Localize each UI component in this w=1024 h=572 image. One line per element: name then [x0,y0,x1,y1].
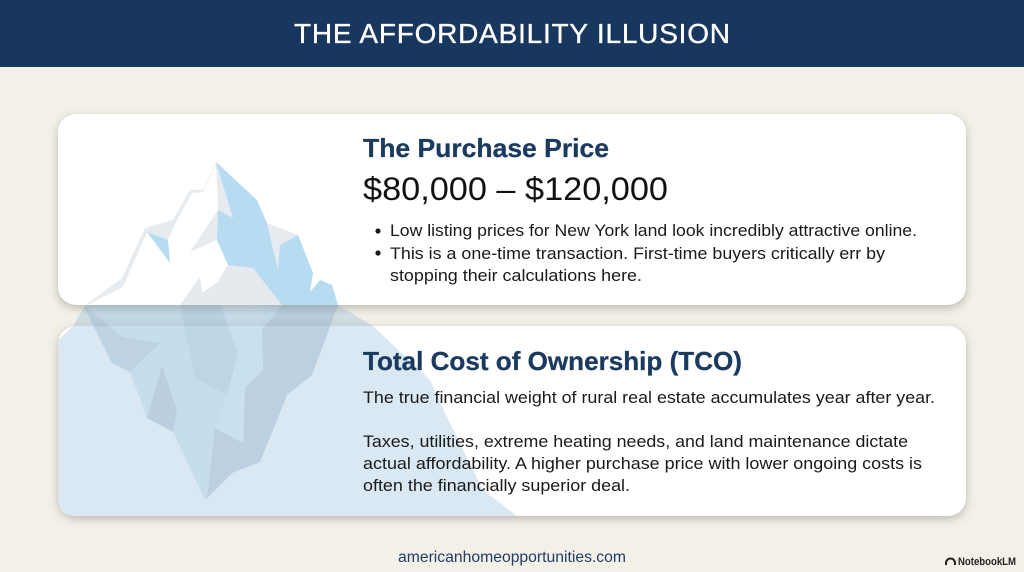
title: THE AFFORDABILITY ILLUSION [294,18,730,49]
bullet list: Low listing prices for New York land look incredibly attractive online. [390,221,917,240]
icon: notebook logo [945,558,956,565]
bullet list: stopping their calculations here. [390,266,642,285]
heading: total cost of ownership: Total Cost of Ownership (TCO) [363,346,742,376]
icon: iceberg [58,162,517,516]
iceberg below water [83,305,338,500]
iceberg above water [87,162,338,305]
panel: purchase price card [58,114,966,305]
header bar [0,0,1024,67]
heading: the purchase price: The Purchase Price [363,133,609,163]
water over lower card [58,326,517,516]
text block: TCO description: The true financial weight of rural real estate accumulates year after year. [363,388,935,407]
bullet list [375,221,917,285]
bullet list: This is a one-time transaction. First-time buyers critically err by [390,244,886,263]
price range: $80,000 – $120,000 [363,171,668,207]
panel: total cost of ownership card [58,326,966,516]
water band between cards [73,305,373,326]
shadow over water band [73,305,373,326]
text block: TCO description: often the financially superior deal. [363,476,630,495]
text block: TCO description: actual affordability. A higher purchase price with lower ongoing costs is [363,454,922,473]
footer website: americanhomeopportunities.com [398,549,626,566]
text block: TCO description [363,388,935,495]
text block: TCO description: Taxes, utilities, extreme heating needs, and land maintenance dictate [363,432,908,451]
NotebookLM badge: NotebookLM [958,556,1016,568]
